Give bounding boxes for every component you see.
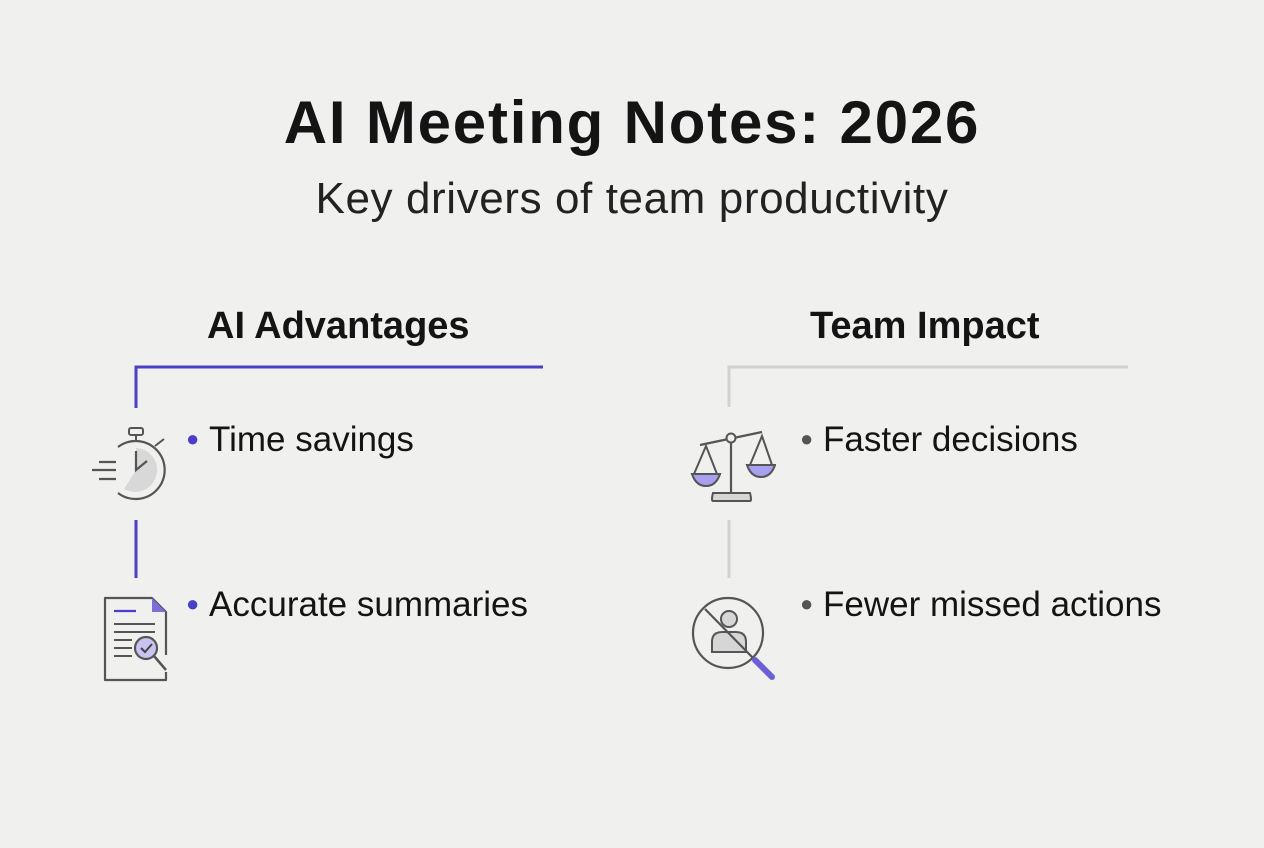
item: Time savings: ● Time savings xyxy=(186,420,414,459)
icon: document with magnifier xyxy=(104,596,168,682)
item: Fewer missed actions: ● Fewer missed actions xyxy=(800,585,1161,624)
item: Faster decisions: ● Faster decisions xyxy=(800,420,1078,459)
title: AI Meeting Notes: 2026 xyxy=(284,89,980,156)
icon: scales xyxy=(690,430,776,502)
heading: Team Impact: Team Impact xyxy=(810,305,1039,347)
item: Accurate summaries: ● Accurate summaries xyxy=(186,585,528,624)
icon: stopwatch xyxy=(92,427,166,500)
heading: AI Advantages: AI Advantages xyxy=(207,305,470,347)
subtitle: Key drivers of team productivity xyxy=(316,174,948,223)
icon: person with slash and magnifier xyxy=(692,596,775,680)
